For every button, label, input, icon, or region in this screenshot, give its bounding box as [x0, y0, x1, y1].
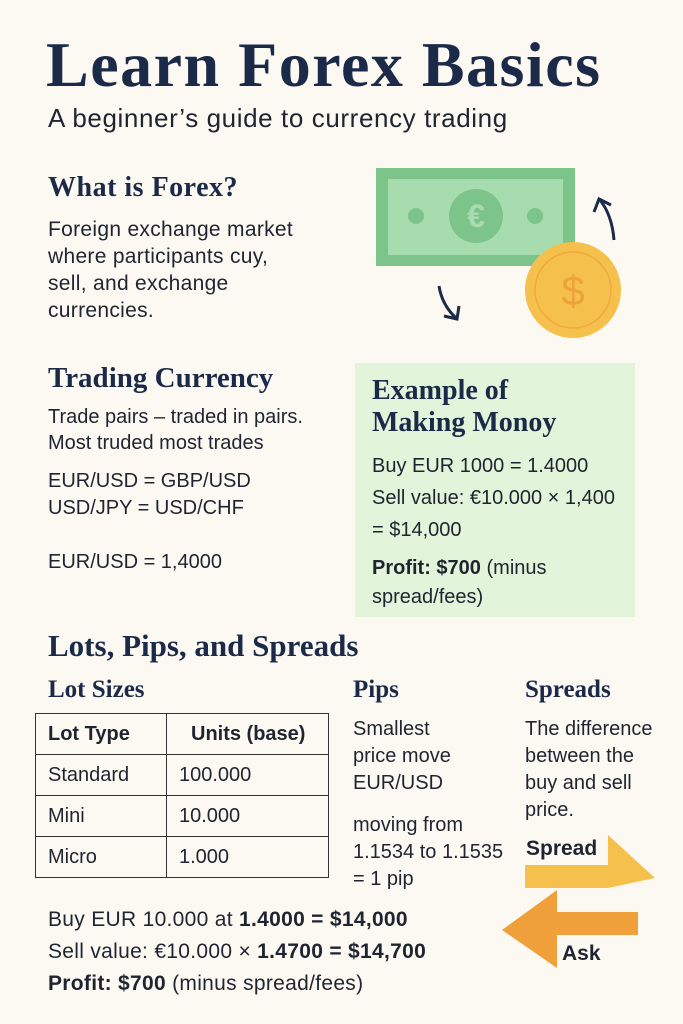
text: spreads description: [525, 718, 652, 821]
text: pips description: EUR/USD: [353, 772, 443, 794]
text: bottom example: Sell value: €10.000 × 1.4700 = $14,700: [48, 940, 426, 963]
text: spreads description: The difference: [525, 718, 652, 740]
text: pairs list: USD/JPY = USD/CHF: [48, 497, 244, 519]
heading: pips: Pips: [353, 676, 399, 703]
icon: spread arrows: Ask: [562, 942, 601, 965]
text: profit: [372, 557, 547, 608]
text: pips example: [353, 814, 503, 890]
text: spreads description: between the: [525, 745, 634, 767]
text: pips description: Smallest: [353, 718, 430, 740]
icon: spread arrows: [502, 835, 655, 968]
title: Learn Forex Basics: [46, 29, 602, 100]
text: pips description: [353, 718, 451, 794]
text: bottom example: [48, 908, 426, 995]
text: trading pairs: Most truded most trades: [48, 432, 264, 454]
text: example lines: [372, 455, 615, 541]
text: pairs list: EUR/USD = GBP/USD: [48, 470, 251, 492]
text: profit: Profit: $700 (minus: [372, 557, 547, 579]
table: lot sizes: 100.000: [179, 764, 251, 786]
text: forex definition: where participants cuy,: [48, 245, 268, 268]
text: forex definition: Foreign exchange market: [48, 218, 293, 241]
table: lot sizes: [35, 713, 329, 878]
panel: example of making money: [355, 363, 635, 617]
text: pips description: price move: [353, 745, 451, 767]
heading: lots pips spreads: Lots, Pips, and Spreads: [48, 628, 358, 663]
heading: what is forex: What is Forex?: [48, 172, 238, 203]
text: pips example: moving from: [353, 814, 463, 836]
text: trading pairs: [48, 406, 303, 454]
text: pairs list: [48, 470, 251, 519]
text: forex definition: sell, and exchange: [48, 272, 229, 295]
table: lot sizes: Standard: [48, 764, 129, 786]
text: pips example: 1.1534 to 1.1535: [353, 841, 503, 863]
text: bottom example: Profit: $700 (minus spread/fees): [48, 972, 363, 995]
icon: money exchange: €: [467, 198, 485, 234]
text: example lines: Sell value: €10.000 × 1,400: [372, 487, 615, 509]
icon: money exchange: [376, 168, 621, 338]
text: rate: EUR/USD = 1,4000: [48, 551, 222, 573]
text: spreads description: price.: [525, 799, 574, 821]
text: example lines: = $14,000: [372, 519, 462, 541]
heading: example: Example of: [372, 375, 508, 406]
text: bottom example: Buy EUR 10.000 at 1.4000 = $14,000: [48, 908, 408, 931]
text: pips example: = 1 pip: [353, 868, 414, 890]
text: example lines: Buy EUR 1000 = 1.4000: [372, 455, 588, 477]
table: lot sizes: Units (base): [191, 722, 305, 744]
table: lot sizes: 1.000: [179, 846, 229, 868]
heading: example: [372, 375, 556, 438]
heading: trading currency: Trading Currency: [48, 362, 273, 394]
table: lot sizes: Mini: [48, 804, 85, 826]
icon: money exchange: $: [561, 267, 585, 314]
text: trading pairs: Trade pairs – traded in pairs.: [48, 406, 303, 428]
text: profit: spread/fees): [372, 586, 483, 608]
heading: spreads: Spreads: [525, 676, 611, 703]
subtitle: A beginner’s guide to currency trading: [48, 103, 508, 133]
heading: example: Making Monoy: [372, 407, 556, 438]
table: lot sizes: Micro: [48, 846, 97, 868]
table: lot sizes: Lot Type: [48, 722, 130, 744]
heading: lot sizes: Lot Sizes: [48, 676, 145, 703]
icon: spread arrows: Spread: [526, 837, 597, 860]
table: lot sizes: 10.000: [179, 804, 240, 826]
text: forex definition: currencies.: [48, 299, 154, 322]
text: spreads description: buy and sell: [525, 772, 632, 794]
text: forex definition: [48, 218, 293, 322]
